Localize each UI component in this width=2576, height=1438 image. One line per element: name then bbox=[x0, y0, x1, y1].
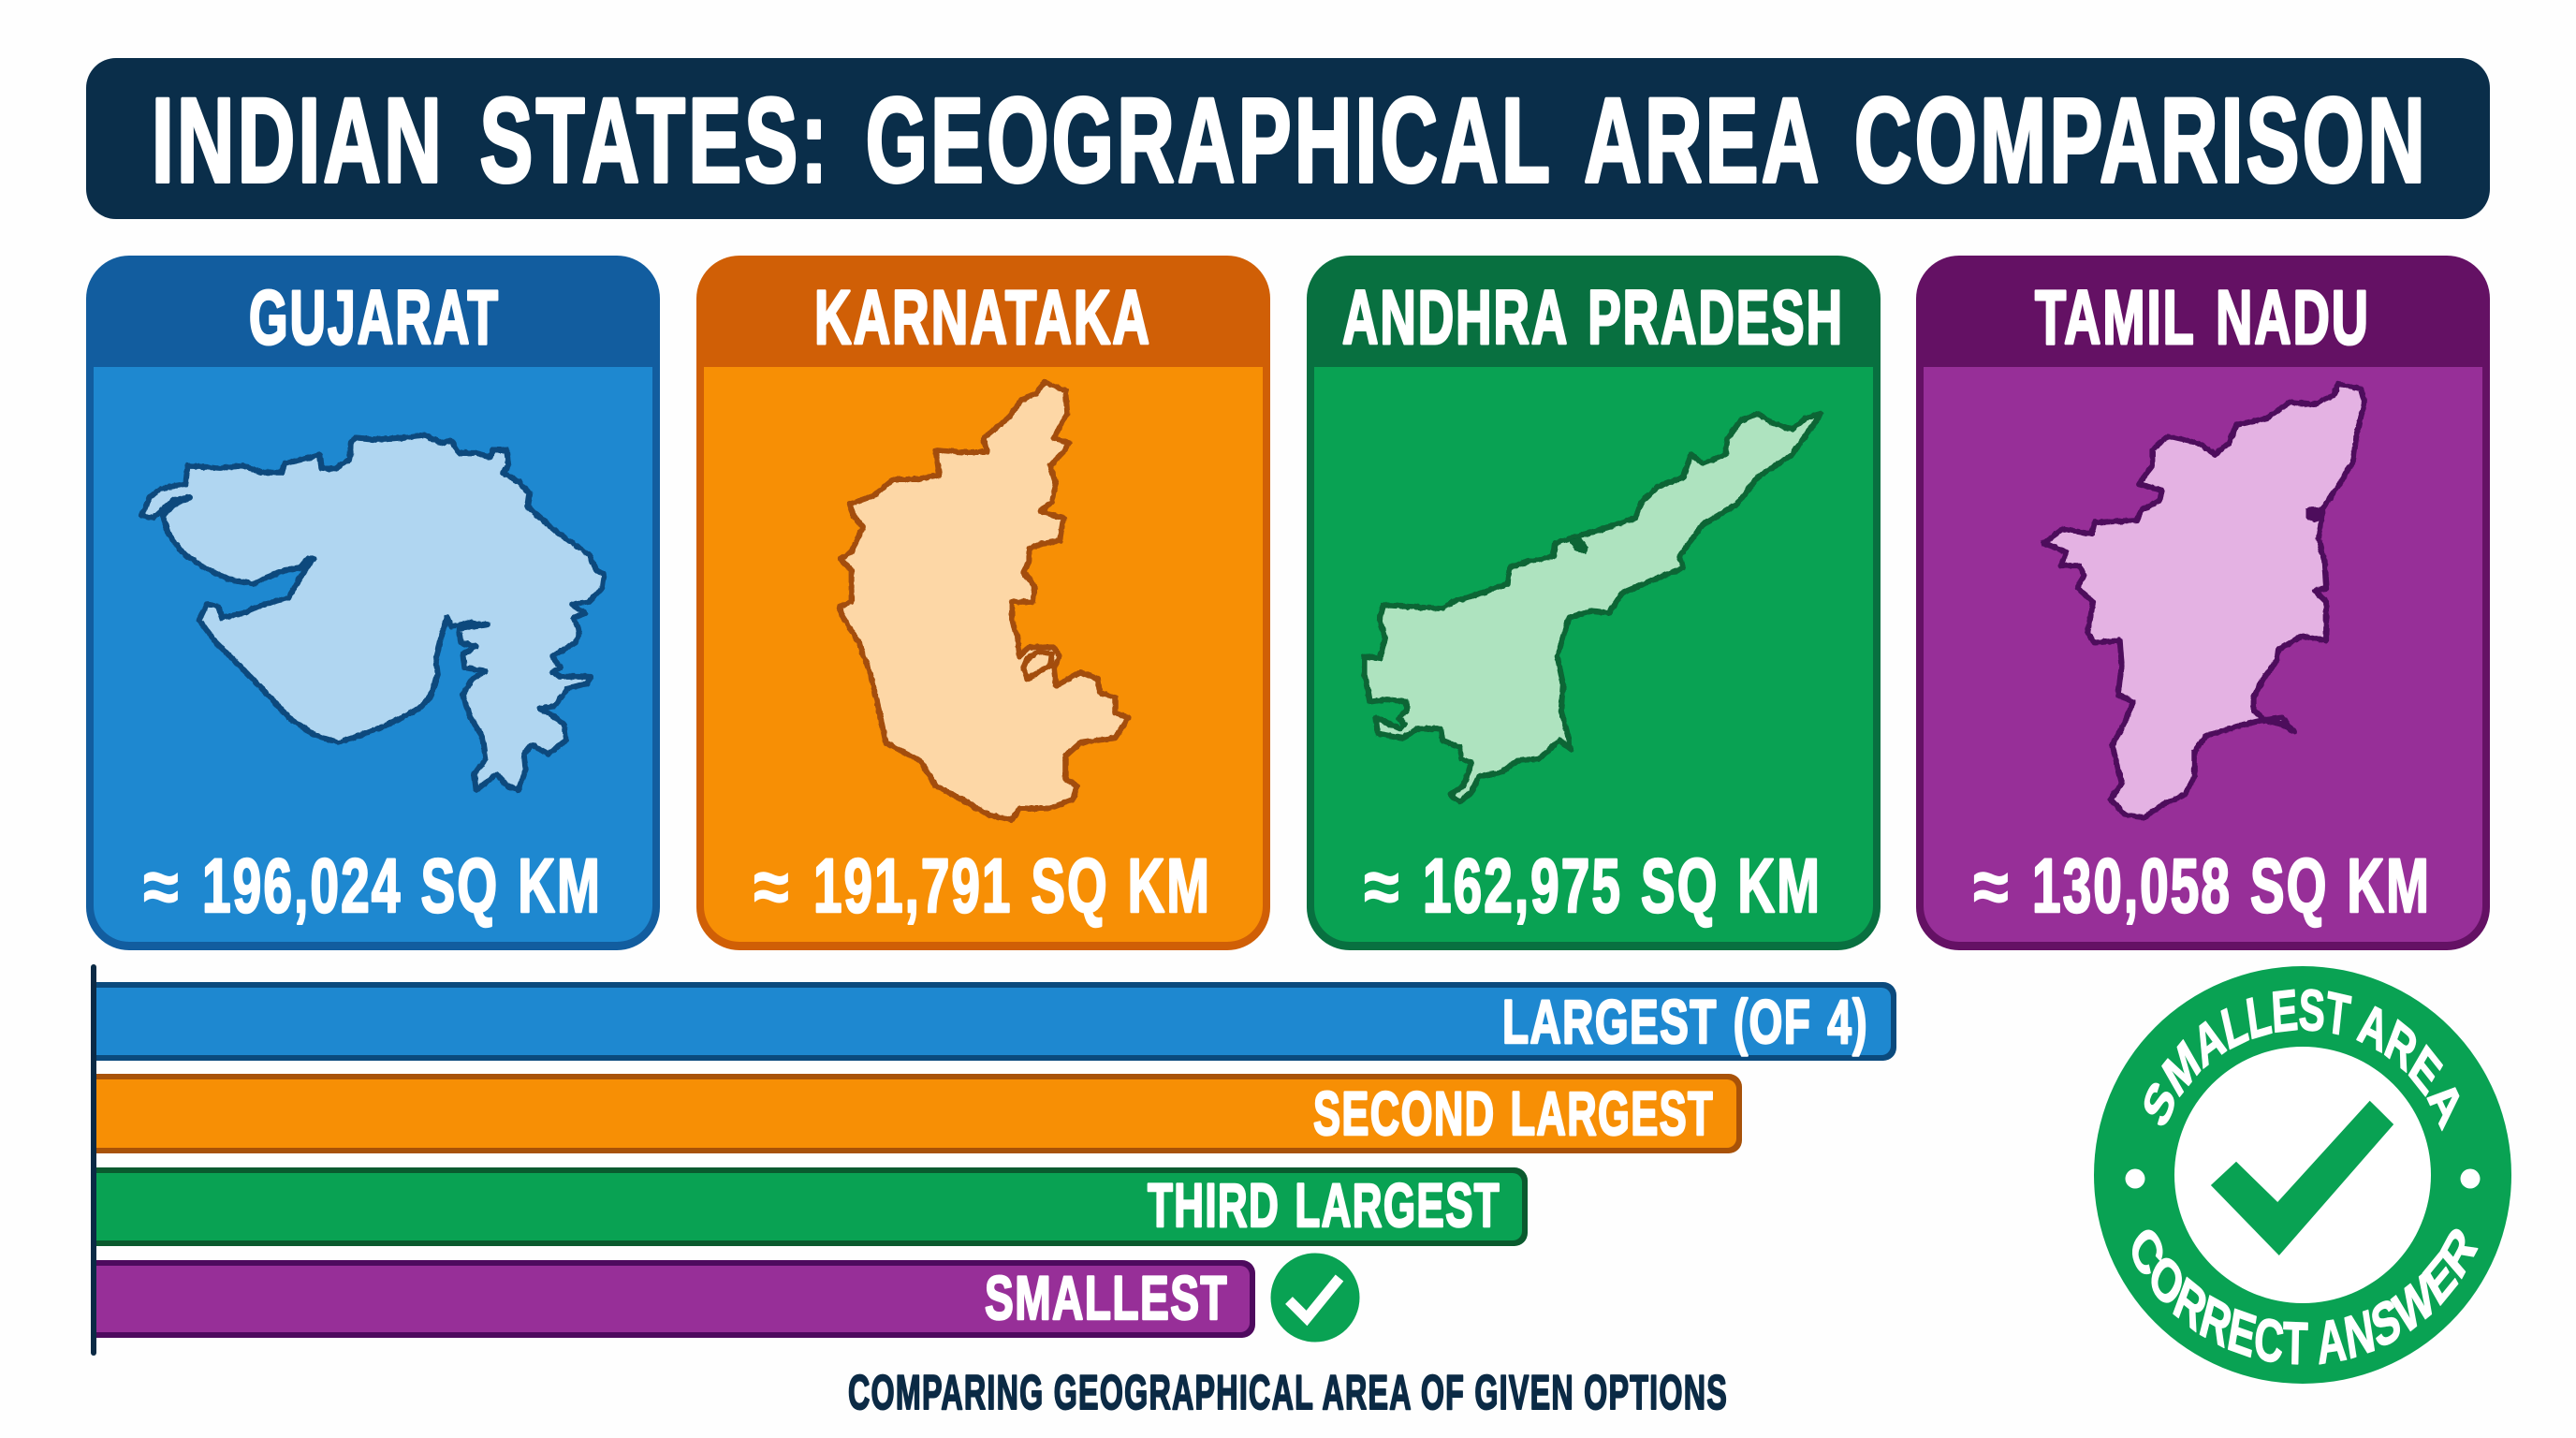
area value: Gujarat: 196,024 SQ KM bbox=[202, 844, 602, 929]
icon: small check mark bbox=[1271, 1253, 1359, 1343]
map: Andhra Pradesh outline bbox=[1365, 414, 1821, 801]
bar: largest: LARGEST (OF 4) bbox=[1502, 987, 1868, 1056]
heading: Tamil Nadu: TAMIL NADU bbox=[2035, 275, 2370, 360]
panel: Gujarat bbox=[86, 256, 660, 950]
bar: smallest bbox=[94, 1260, 1255, 1338]
badge top text: SMALLEST AREA bbox=[2144, 989, 2460, 1131]
heading: Gujarat: GUJARAT bbox=[249, 275, 500, 360]
panel: Andhra Pradesh bbox=[1307, 256, 1881, 950]
chart axis bbox=[91, 964, 96, 1356]
bar chart bbox=[91, 964, 1896, 1356]
bar: smallest: SMALLEST bbox=[985, 1263, 1228, 1332]
badge bottom text: CORRECT ANSWER bbox=[2132, 1228, 2479, 1365]
approx symbol: ≈ bbox=[754, 844, 789, 930]
map: Gujarat outline bbox=[141, 435, 604, 790]
heading: Karnataka: KARNATAKA bbox=[814, 275, 1151, 360]
bar: third largest bbox=[94, 1167, 1528, 1246]
approx symbol: ≈ bbox=[143, 844, 179, 930]
panel: Karnataka bbox=[696, 256, 1270, 950]
area value: Karnataka: 191,791 SQ KM bbox=[813, 844, 1211, 929]
bar: second largest: SECOND LARGEST bbox=[1313, 1078, 1714, 1148]
area value: Andhra Pradesh: 162,975 SQ KM bbox=[1423, 844, 1822, 929]
map: Tamil Nadu outline bbox=[2043, 384, 2364, 817]
panel: Tamil Nadu bbox=[1916, 256, 2490, 950]
badge ring text bbox=[2132, 989, 2479, 1365]
badge check mark bbox=[2211, 1101, 2393, 1255]
enclave loop bbox=[1023, 652, 1052, 679]
badge: smallest area, correct answer bbox=[2094, 966, 2511, 1384]
bar: second largest bbox=[94, 1074, 1742, 1153]
inland water blob bbox=[1569, 537, 1589, 554]
caption: COMPARING GEOGRAPHICAL AREA OF GIVEN OPTIONS bbox=[848, 1366, 1728, 1420]
title banner bbox=[86, 58, 2490, 219]
map: Karnataka outline bbox=[840, 382, 1129, 820]
approx symbol: ≈ bbox=[1973, 844, 2009, 930]
badge dots bbox=[2125, 1168, 2481, 1189]
bar: largest bbox=[94, 982, 1896, 1061]
heading: Andhra Pradesh: ANDHRA PRADESH bbox=[1342, 275, 1844, 360]
coastal blob bbox=[2306, 506, 2322, 522]
bar: third largest: THIRD LARGEST bbox=[1148, 1170, 1500, 1240]
approx symbol: ≈ bbox=[1364, 844, 1399, 930]
